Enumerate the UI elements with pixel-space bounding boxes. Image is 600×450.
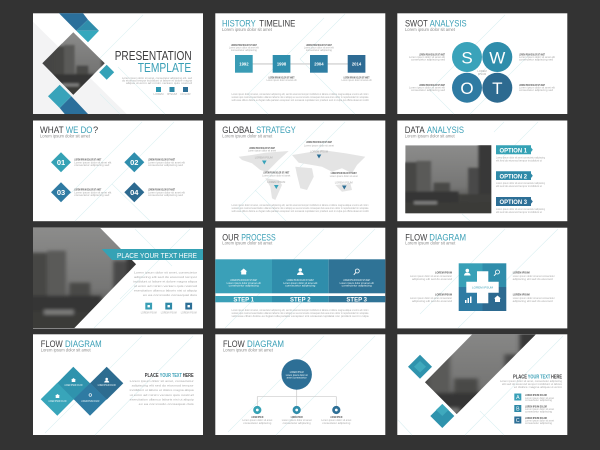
item notes: consectetur adipiscing sed <box>148 193 184 197</box>
description: do eiusmod tempor incididunt ut labore et dolore magna <box>122 78 193 82</box>
option 1 <box>496 145 545 162</box>
body text: incididunt ut labore et dolore magna aliqua <box>133 280 198 284</box>
heading: HISTORY <box>222 18 256 28</box>
panel: global strategy <box>215 120 385 221</box>
body text <box>133 270 198 297</box>
ribbon: PLACE YOUR TEXT HERE <box>117 251 197 260</box>
right notes: Lorem ipsum dolor sit amet elit <box>519 86 555 90</box>
timeline boxes: 1992 <box>239 61 249 66</box>
item C: consectetur adipiscing <box>525 421 553 425</box>
description <box>122 76 193 85</box>
heading <box>41 339 102 353</box>
text heading: PLACE <box>513 374 527 380</box>
world map <box>239 150 365 200</box>
icon row: IPSUM <box>167 92 177 96</box>
text heading: PLACE <box>145 373 159 379</box>
item B: consectetur adipiscing <box>525 410 553 414</box>
text heading <box>513 374 562 380</box>
option 2: Lorem ipsum dolor sit amet consectetur adipiscing <box>496 181 545 185</box>
item notes: consectetur adipiscing sed <box>74 163 110 167</box>
heading: GLOBAL <box>222 125 254 135</box>
body text: Lorem ipsum dolor sit amet, consectetur <box>134 270 197 274</box>
right notes: consectetur adipiscing sed <box>519 58 554 62</box>
bottom diamonds <box>48 85 88 114</box>
title: TEMPLATE <box>138 60 191 75</box>
heading: Lorem ipsum dolor sit amet <box>405 241 456 246</box>
body text: Lorem ipsum dolor sit amet, consectetur <box>130 379 194 383</box>
body text <box>130 379 195 406</box>
diagonal photo <box>425 334 536 414</box>
angled photo <box>33 228 136 328</box>
heading: Lorem ipsum dolor sit amet <box>222 133 273 138</box>
timeline boxes <box>235 55 365 73</box>
item B: B <box>516 406 520 412</box>
item A: consectetur adipiscing <box>525 398 553 402</box>
milestone labels <box>229 44 372 82</box>
body text: velit esse cillum dolore eu fugiat nulla pariatur excepteur sint occaecat cupidatat non proident sunt in culpa qui officia deserunt mollit <box>232 98 369 102</box>
text heading: YOUR TEXT <box>160 373 182 379</box>
body text <box>232 92 369 102</box>
left notes: adipiscing elit sed do eiusmod <box>412 299 453 303</box>
left notes: LOREM IPSUM DOLOR SIT AMET <box>419 54 445 56</box>
map labels: LOREM IPSUM <box>267 180 285 184</box>
description: aliqua ut enim ad minim veniam quis nostrud <box>126 81 193 85</box>
step 2 column: LOREM IPSUM DOLOR SIT AMET <box>287 279 314 282</box>
text heading: YOUR TEXT <box>528 374 551 380</box>
right node: Lorem ipsum dolor sit amet <box>321 418 352 422</box>
option 1: OPTION 1 <box>500 147 528 154</box>
cross diagram: LOREM IPSUM <box>472 285 493 289</box>
heading: WE DO <box>66 125 92 135</box>
milestone labels: Lorem ipsum dolor sit amet elit <box>229 46 259 50</box>
title: PRESENTATION <box>115 48 192 63</box>
map labels: Lorem ipsum dolor sit amet <box>304 143 334 147</box>
step 2 column: Lorem ipsum dolor sit amet elit <box>283 282 318 285</box>
item B <box>514 405 554 414</box>
map labels: LOREM IPSUM <box>335 180 353 184</box>
step 1 column <box>215 259 272 303</box>
heading <box>405 232 466 246</box>
heading <box>405 125 464 138</box>
right notes: LOREM IPSUM <box>513 272 530 274</box>
heading: Lorem ipsum dolor sit amet <box>223 348 274 353</box>
description: Lorem ipsum dolor sit amet, consectetur adipiscing <box>500 379 563 383</box>
numbered diamonds: 02 <box>130 158 138 167</box>
heading <box>40 125 98 138</box>
heading: ANALYSIS <box>427 125 464 135</box>
right node <box>321 406 352 425</box>
body text: Lorem ipsum dolor sit amet, consectetur adipiscing elit, sed do eiusmod tempor incididunt ut labore et dolore magna aliqua ut enim ad minim <box>232 308 368 312</box>
swot circles <box>452 42 512 103</box>
diamond lattice: LOREM IPSUM DOLOR <box>81 401 100 403</box>
heading <box>222 232 276 246</box>
description: elit sed do eiusmod tempor incididunt ut labore <box>502 382 563 386</box>
left notes: Lorem ipsum dolor sit amet consectetur <box>410 274 452 278</box>
option 1: Lorem ipsum dolor sit amet consectetur adipiscing <box>496 155 545 159</box>
left notes: Lorem ipsum dolor sit amet consectetur <box>410 296 452 300</box>
step 1 column: STEP 1 <box>233 297 255 303</box>
item notes: LOREM IPSUM DOLOR SIT AMET <box>148 189 175 192</box>
item notes: Lorem ipsum dolor sit amet elit <box>74 160 112 164</box>
heading: Lorem ipsum dolor sit amet <box>222 241 273 246</box>
heading: OUR <box>222 232 239 242</box>
left node: Lorem ipsum dolor sit amet <box>242 418 273 422</box>
heading: TIMELINE <box>259 18 295 28</box>
diamond lattice: LOREM IPSUM DOLOR <box>98 385 116 387</box>
item B: LOREM IPSUM DOLOR <box>525 405 547 408</box>
body text: veniam quis nostrud exercitation ullamco laboris nisi ut aliquip ex ea commodo consequat duis aute irure dolor in reprehenderit in voluptate <box>232 95 369 99</box>
heading: Lorem ipsum dolor sit amet <box>41 348 92 353</box>
panel: our process <box>215 228 385 328</box>
item notes: Lorem ipsum dolor sit amet elit <box>148 160 185 164</box>
numbered diamonds: 03 <box>57 188 65 197</box>
panel: presentation template <box>33 13 203 114</box>
text heading <box>145 373 194 379</box>
body text: exercitation ullamco laboris nisi ut aliquip <box>130 397 194 401</box>
right notes <box>513 272 555 303</box>
centre label: IPSUM <box>478 72 486 76</box>
top diamond <box>408 355 432 379</box>
milestone labels: consectetur adipiscing <box>306 48 332 52</box>
milestone labels: LOREM IPSUM DOLOR SIT AMET <box>268 77 295 80</box>
connectors <box>257 389 336 410</box>
heading: Lorem ipsum dolor sit amet <box>405 133 456 138</box>
panel: flow diagram diamonds <box>33 334 203 435</box>
map pins <box>262 154 347 190</box>
item notes: LOREM IPSUM DOLOR SIT AMET <box>74 159 102 162</box>
panel: diagonal photo <box>397 334 568 436</box>
item notes <box>74 159 185 197</box>
body text: velit esse cillum dolore eu fugiat nulla pariatur excepteur sint occaecat cupidatat non proident sunt in culpa qui officia deserunt mollit <box>232 209 369 213</box>
map labels: Lorem ipsum dolor sit amet <box>330 174 358 178</box>
icon row: DOLOR <box>180 92 191 96</box>
top circle: LOREM IPSUM <box>290 372 304 374</box>
map labels: LOREM IPSUM DOLOR SIT AMET <box>331 172 357 175</box>
heading: DIAGRAM <box>65 339 102 349</box>
right node: LOREM IPSUM <box>330 416 342 419</box>
item C: Lorem ipsum dolor sit amet <box>525 419 554 423</box>
item C: LOREM IPSUM DOLOR <box>525 417 547 420</box>
left notes: Lorem ipsum dolor sit amet elit <box>409 55 445 59</box>
body text: Lorem ipsum dolor sit amet, consectetur adipiscing elit, sed do eiusmod tempor incididunt ut labore et dolore magna aliqua ut enim ad minim <box>232 203 368 207</box>
small diamond <box>99 65 114 80</box>
timeline boxes: 1998 <box>277 61 287 66</box>
heading: FLOW <box>223 339 245 349</box>
right notes: LOREM IPSUM DOLOR SIT AMET <box>519 54 545 56</box>
step 2 column: STEP 2 <box>290 297 311 303</box>
map labels: Lorem ipsum dolor sit amet <box>262 174 291 178</box>
option 2: elit sed do eiusmod tempor incididunt ut <box>496 184 542 188</box>
top circle: amet consectetur <box>287 377 307 380</box>
diamond lattice: LOREM IPSUM DOLOR <box>64 385 83 387</box>
heading <box>222 125 296 138</box>
panel: flow diagram cross <box>397 228 567 328</box>
item A <box>514 394 554 402</box>
diamond lattice: LOREM IPSUM DOLOR <box>48 401 67 403</box>
body text: veniam quis nostrud exercitation ullamco laboris nisi ut aliquip ex ea commodo consequat duis aute irure dolor in reprehenderit in voluptate <box>232 206 369 210</box>
map labels: LOREM IPSUM DOLOR SIT AMET <box>306 141 332 144</box>
step 1 column: Lorem ipsum dolor sit amet elit <box>227 282 261 285</box>
item notes: LOREM IPSUM DOLOR SIT AMET <box>148 159 175 162</box>
body text: exercitation ullamco laboris nisi ut aliquip <box>134 288 198 292</box>
item notes: Lorem ipsum dolor sit amet elit <box>148 190 185 194</box>
body text: ex ea commodo consequat duis <box>143 293 198 297</box>
left node <box>242 406 273 425</box>
heading: FLOW <box>41 339 63 349</box>
item notes: Lorem ipsum dolor sit amet elit <box>74 190 112 194</box>
left notes: consectetur adipiscing sed <box>411 58 446 62</box>
item C: C <box>516 418 520 424</box>
step 1 column: LOREM IPSUM DOLOR SIT AMET <box>230 279 258 282</box>
body text: velit esse cillum dolore eu fugiat nulla pariatur excepteur sint occaecat cupidatat non proident sunt in culpa <box>232 314 369 318</box>
left notes: adipiscing elit sed do eiusmod <box>412 277 453 281</box>
step 3 column: Lorem ipsum dolor sit amet elit <box>340 282 374 285</box>
panel: place your text <box>29 223 203 332</box>
top circle <box>282 359 312 390</box>
panel: history timeline <box>215 13 385 114</box>
step 1 column: consectetur adipiscing <box>229 284 260 288</box>
right node: consectetur adipiscing <box>322 421 351 425</box>
title <box>115 48 192 75</box>
right notes: LOREM IPSUM <box>513 294 530 296</box>
step 3 column <box>329 259 385 303</box>
swot circles: T <box>492 79 502 98</box>
heading <box>223 339 284 353</box>
milestone labels: Lorem ipsum dolor sit amet elit <box>342 78 372 82</box>
icon row: LOREM <box>154 92 164 96</box>
icon row <box>141 303 197 314</box>
body text: ut enim ad minim veniam quis nostrud <box>130 393 195 397</box>
icon row: LOREM IPSUM <box>181 310 197 314</box>
heading: Lorem ipsum dolor sit amet <box>40 133 91 138</box>
numbered diamonds: 04 <box>130 188 139 197</box>
body text: adipiscing elit sed do eiusmod tempor <box>132 384 194 388</box>
centre node <box>282 406 312 425</box>
description: Lorem ipsum dolor sit amet, consectetur adipiscing elit, sed <box>122 76 193 80</box>
timeline boxes: 2004 <box>314 61 324 66</box>
item C <box>514 416 554 425</box>
item notes: consectetur adipiscing sed <box>148 163 184 167</box>
milestone labels: Lorem ipsum dolor sit amet elit <box>266 78 297 82</box>
timeline boxes: 2014 <box>352 61 362 66</box>
left notes <box>410 272 453 303</box>
heading: ? <box>93 125 98 135</box>
item notes: consectetur adipiscing sed <box>74 193 110 197</box>
top circle: Lorem ipsum dolor sit <box>286 374 308 377</box>
step 3 column: LOREM IPSUM DOLOR SIT AMET <box>343 279 371 282</box>
body text: veniam quis nostrud exercitation ullamco laboris nisi ut aliquip ex ea commodo consequat duis aute irure dolor in reprehenderit in voluptate <box>232 311 369 315</box>
swot circles: S <box>461 48 473 68</box>
option 2: OPTION 2 <box>500 173 528 180</box>
left node: consectetur adipiscing <box>243 421 272 425</box>
centre node: consectetur adipiscing <box>283 421 311 425</box>
item A: A <box>516 395 520 401</box>
centre node: Lorem ipsum dolor sit amet <box>282 418 312 422</box>
right notes: adipiscing elit sed do eiusmod <box>513 277 553 281</box>
centre label <box>477 69 487 76</box>
icon row: LOREM IPSUM <box>141 310 157 314</box>
map labels: LOREM IPSUM DOLOR SIT AMET <box>263 172 290 174</box>
right notes <box>519 54 555 92</box>
option 1: elit sed do eiusmod tempor incididunt ut <box>496 158 542 162</box>
heading: Lorem ipsum dolor sit amet <box>405 27 456 32</box>
item notes: LOREM IPSUM DOLOR SIT AMET <box>74 189 102 192</box>
cross diagram <box>459 263 506 311</box>
option 3: Lorem ipsum dolor sit amet consectetur adipiscing <box>496 207 545 211</box>
heading <box>222 18 295 32</box>
map labels: LOREM IPSUM DOLOR SIT AMET <box>249 147 275 150</box>
panel: flow diagram org chart <box>215 334 385 435</box>
milestone labels: Lorem ipsum dolor sit amet elit <box>304 46 334 50</box>
body text <box>232 203 369 213</box>
body text: Lorem ipsum dolor sit amet, consectetur adipiscing elit, sed do eiusmod tempor incididunt ut labore et dolore magna aliqua ut enim ad minim <box>232 92 368 96</box>
city photo <box>405 145 492 214</box>
left notes: Lorem ipsum dolor sit amet elit <box>409 86 445 90</box>
option 2 <box>496 171 545 188</box>
item A: Lorem ipsum dolor sit amet <box>525 396 554 400</box>
ribbon <box>102 249 203 260</box>
map labels <box>248 141 358 184</box>
body text: ex ea commodo consequat duis <box>139 402 195 406</box>
numbered diamonds <box>51 152 144 202</box>
right notes: LOREM IPSUM DOLOR SIT AMET <box>519 84 545 87</box>
body text: adipiscing elit sed do eiusmod tempor <box>134 275 197 279</box>
bottom diamond <box>430 404 454 428</box>
icon row <box>154 87 191 96</box>
description: et dolore magna aliqua ut enim <box>514 385 562 389</box>
heading: ANALYSIS <box>430 18 467 28</box>
description <box>500 379 563 389</box>
text heading: HERE <box>183 373 194 379</box>
panel: data analysis <box>397 120 567 221</box>
left notes <box>409 54 446 92</box>
step 3 column: consectetur adipiscing <box>342 284 373 288</box>
heading: DIAGRAM <box>429 232 466 242</box>
step 2 column <box>272 259 329 303</box>
left notes: consectetur adipiscing sed <box>411 88 446 92</box>
option 3: elit sed do eiusmod tempor incididunt ut <box>496 210 542 214</box>
option 3 <box>496 197 545 214</box>
centre node: LOREM IPSUM <box>291 416 303 419</box>
swot circles: O <box>460 79 474 98</box>
milestone labels: consectetur adipiscing <box>231 48 257 52</box>
centre label: LOREM <box>477 69 487 73</box>
right notes: Lorem ipsum dolor sit amet elit <box>519 55 555 59</box>
diamond lattice <box>41 367 123 416</box>
body text <box>232 308 369 318</box>
panel: what we do <box>33 120 203 221</box>
milestone labels: LOREM IPSUM DOLOR SIT AMET <box>344 77 370 80</box>
heading: DIAGRAM <box>247 339 284 349</box>
heading: STRATEGY <box>256 125 296 135</box>
swot circles: W <box>489 48 505 68</box>
heading: Lorem ipsum dolor sit amet <box>222 27 273 32</box>
milestone labels: LOREM IPSUM DOLOR SIT AMET <box>306 44 332 47</box>
left notes: LOREM IPSUM <box>435 294 452 296</box>
right notes: Lorem ipsum dolor sit amet consectetur <box>513 296 555 300</box>
heading: PROCESS <box>241 232 276 242</box>
heading <box>405 18 467 32</box>
map labels: LOREM IPSUM <box>310 150 328 154</box>
photo diamond <box>42 32 105 95</box>
option 3: OPTION 3 <box>500 199 528 206</box>
right notes: adipiscing elit sed do eiusmod <box>513 299 553 303</box>
top diamonds <box>59 13 99 42</box>
body text: ut enim ad minim veniam quis nostrud <box>134 284 198 288</box>
item A: LOREM IPSUM DOLOR <box>525 394 547 397</box>
left notes: LOREM IPSUM DOLOR SIT AMET <box>419 84 445 87</box>
left notes: LOREM IPSUM <box>435 272 452 274</box>
left node: LOREM IPSUM <box>251 416 263 419</box>
right notes: Lorem ipsum dolor sit amet consectetur <box>513 274 555 278</box>
milestone labels: LOREM IPSUM DOLOR SIT AMET <box>231 44 257 47</box>
right notes: consectetur adipiscing sed <box>519 88 554 92</box>
text heading: HERE <box>551 374 562 380</box>
numbered diamonds: 01 <box>57 158 65 167</box>
heading: DATA <box>405 125 425 135</box>
body text: incididunt ut labore et dolore magna aliqua <box>130 388 194 392</box>
step 2 column: consectetur adipiscing <box>285 284 316 288</box>
map labels: LOREM IPSUM <box>255 156 273 160</box>
heading: FLOW <box>405 232 427 242</box>
icon row: LOREM IPSUM <box>161 310 177 314</box>
step 3 column: STEP 3 <box>346 297 368 303</box>
panel: swot analysis <box>397 13 567 114</box>
item B: Lorem ipsum dolor sit amet <box>525 407 554 411</box>
heading: WHAT <box>40 125 64 135</box>
map labels: Lorem ipsum dolor sit amet <box>248 148 276 152</box>
heading: SWOT <box>405 18 428 28</box>
